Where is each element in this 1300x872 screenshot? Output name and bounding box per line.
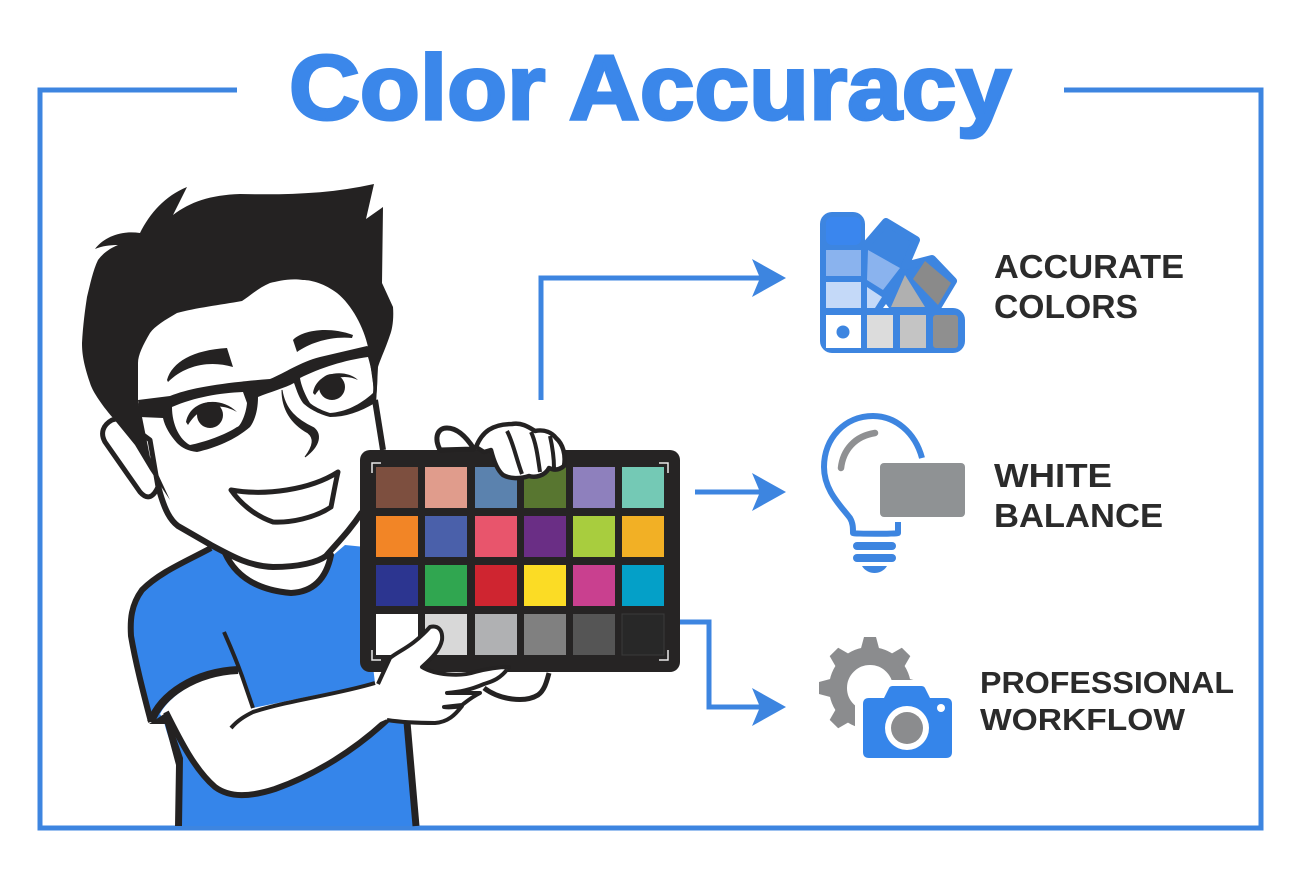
arrow: to professional workflow bbox=[680, 622, 786, 726]
hair bbox=[82, 184, 393, 500]
title: Color Accuracy bbox=[289, 37, 1011, 139]
label: accurate colors bbox=[994, 248, 1184, 325]
label: professional workflow: PROFESSIONAL bbox=[980, 665, 1234, 700]
hand: top fingers bbox=[437, 424, 565, 478]
icon: gear and camera bbox=[819, 637, 960, 765]
color patches bbox=[376, 467, 664, 655]
hand: lower hand bbox=[330, 627, 549, 745]
illustration: person holding color chart bbox=[82, 184, 680, 826]
frame bbox=[40, 90, 1261, 828]
label: accurate colors: COLORS bbox=[994, 288, 1138, 325]
mouth bbox=[231, 472, 338, 522]
arm bbox=[149, 632, 470, 826]
glasses bbox=[138, 346, 377, 452]
eyes bbox=[186, 373, 358, 428]
label: white balance bbox=[994, 457, 1163, 534]
color chart card bbox=[360, 450, 680, 672]
face bbox=[138, 280, 385, 567]
icon: swatch fan bbox=[820, 212, 965, 353]
eyebrows bbox=[167, 330, 353, 382]
label: professional workflow bbox=[980, 665, 1234, 737]
shirt bbox=[131, 545, 416, 826]
arrow: to accurate colors bbox=[541, 259, 786, 400]
arrow: to white balance bbox=[695, 473, 786, 511]
neck bbox=[225, 540, 331, 593]
ear bbox=[103, 418, 158, 497]
nose bbox=[282, 390, 318, 457]
label: white balance: WHITE bbox=[994, 457, 1112, 494]
icon: light bulb with gray card bbox=[824, 416, 965, 573]
label: professional workflow: WORKFLOW bbox=[980, 702, 1186, 737]
label: accurate colors: ACCURATE bbox=[994, 248, 1184, 285]
label: white balance: BALANCE bbox=[994, 497, 1163, 534]
